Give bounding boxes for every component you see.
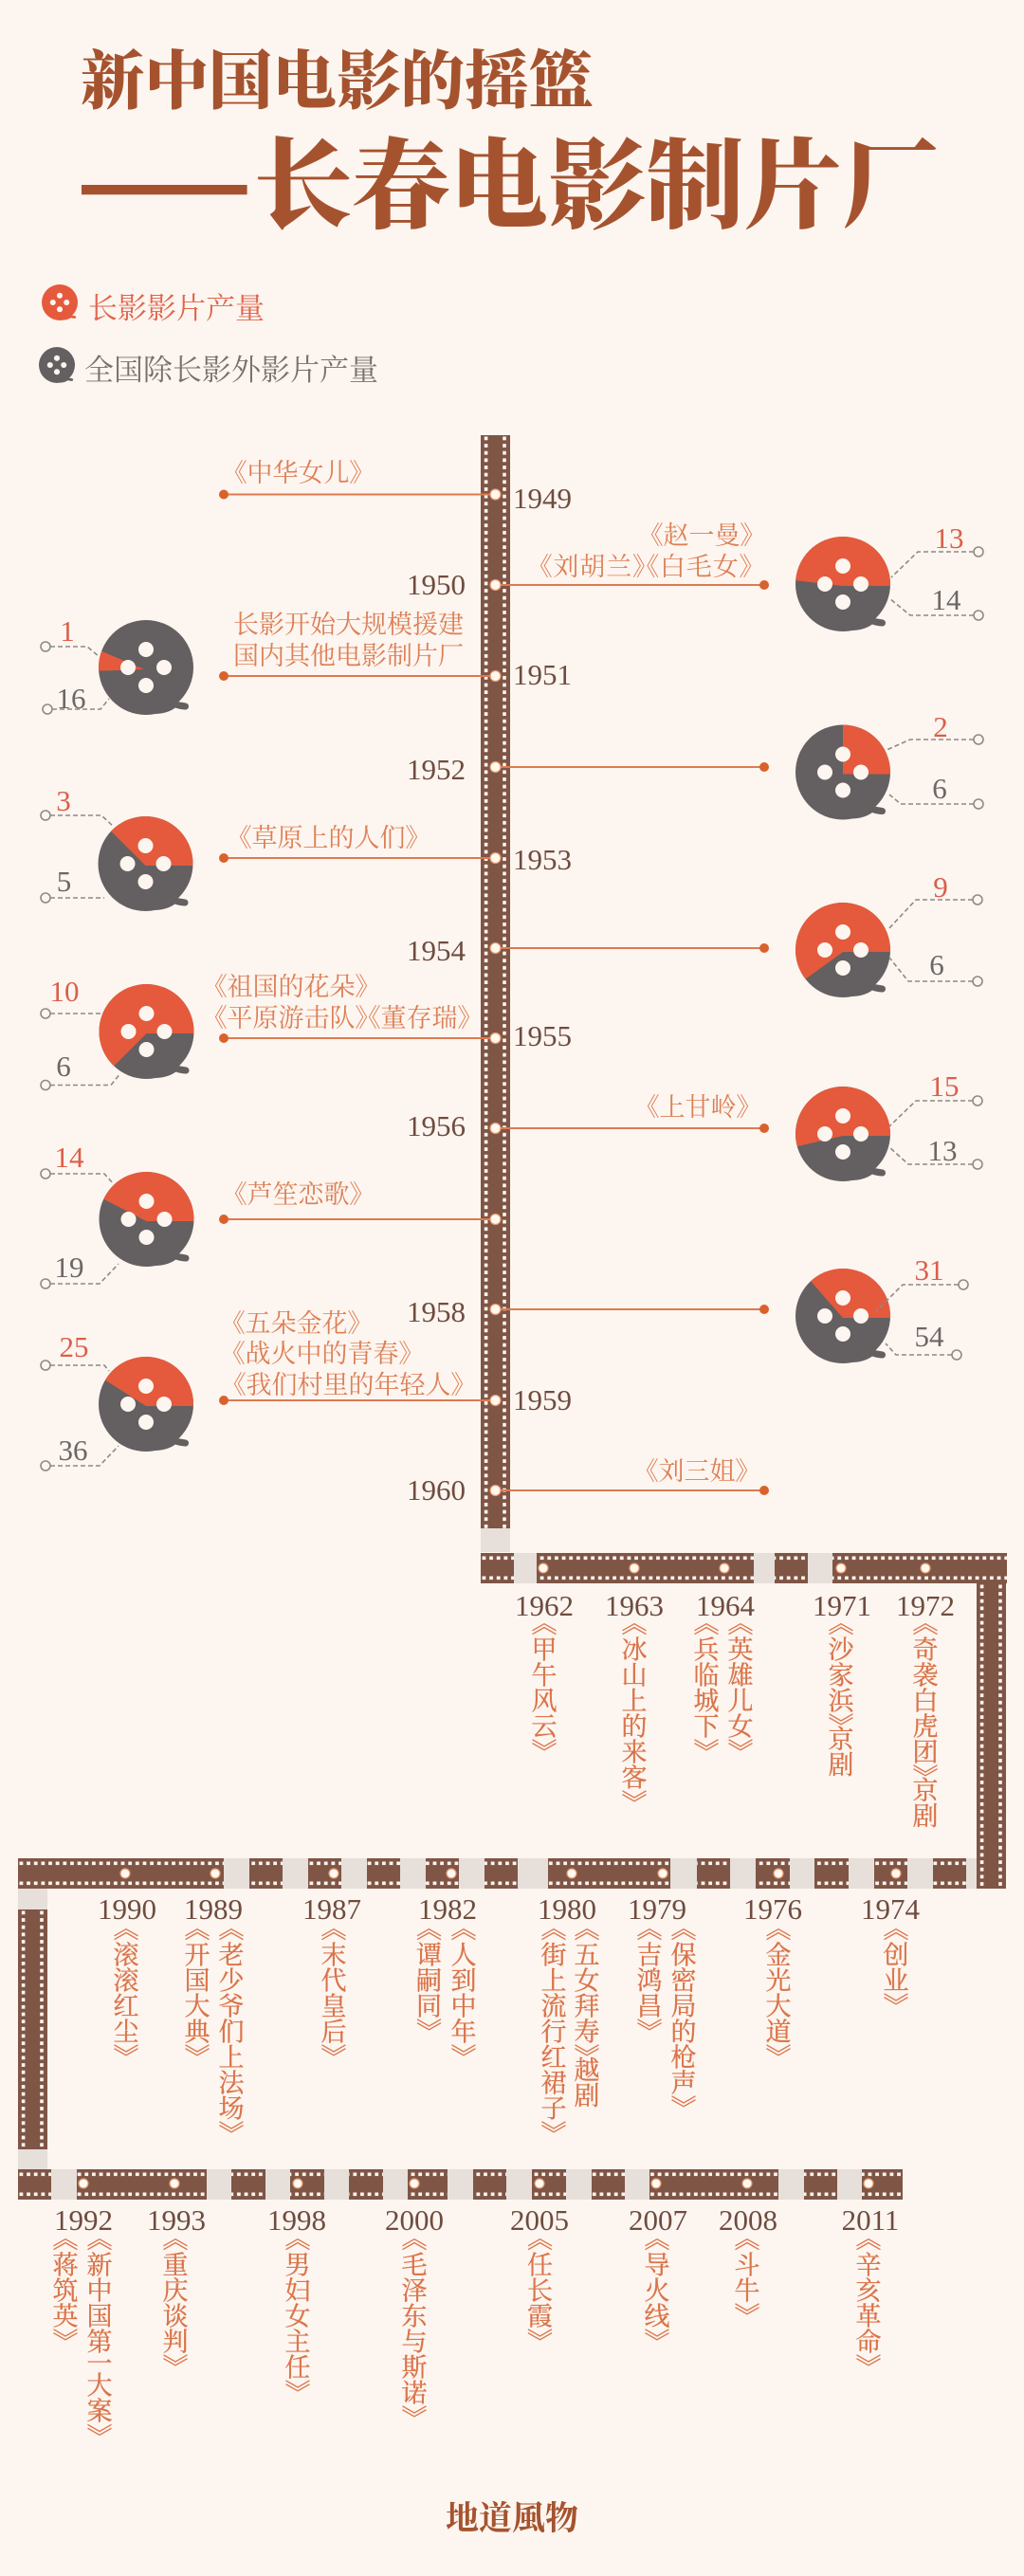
1990: 《滚滚红尘》 xyxy=(108,1928,144,2056)
1992 xyxy=(47,2203,118,2436)
title line 1: 新中国电影的摇篮 xyxy=(81,30,594,122)
1976: 1976 xyxy=(743,1892,802,1926)
2000: 《毛泽东与斯诺》 xyxy=(396,2238,432,2418)
1980: 《五女拜寿》越剧 xyxy=(569,1928,605,2108)
1990: 1990 xyxy=(98,1892,156,1926)
2005: 2005 xyxy=(510,2203,569,2237)
1989: 1989 xyxy=(184,1892,243,1926)
1998 xyxy=(267,2203,326,2392)
reel 1951: 1 / 16 xyxy=(41,614,193,715)
film strip: vertical 1949-1960 xyxy=(481,435,510,1552)
1980: 《街上流行红裙子》 xyxy=(535,1928,573,2133)
reel 1950: 13 / 14 xyxy=(795,529,984,631)
film strip: right vertical connector xyxy=(977,1583,1006,1889)
1972 xyxy=(896,1589,955,1828)
1993: 《重庆谈判》 xyxy=(157,2238,193,2366)
reel 1953: 3 / 5: 5 xyxy=(57,865,71,898)
1998: 1998 xyxy=(267,2203,326,2237)
film title labels 1949-1960: 《芦笙恋歌》 xyxy=(234,1174,362,1211)
1974 xyxy=(861,1892,920,2005)
1987 xyxy=(302,1892,361,2056)
film title labels 1949-1960: 《刘胡兰》《白毛女》 xyxy=(539,546,753,583)
1963 xyxy=(605,1589,664,1802)
film title labels 1949-1960: 《上甘岭》 xyxy=(647,1087,749,1124)
1979: 《吉鸿昌》 xyxy=(631,1928,667,2031)
2008: 2008 xyxy=(719,2203,777,2237)
1964 xyxy=(688,1589,759,1751)
1982: 《人到中年》 xyxy=(446,1928,482,2056)
years on vertical strip: 1951 xyxy=(513,658,572,691)
reel 1958: 31 / 54 xyxy=(795,1253,968,1363)
1974: 1974 xyxy=(861,1892,920,1926)
years on vertical strip: 1959 xyxy=(513,1383,572,1416)
film title labels 1949-1960 xyxy=(214,452,753,1488)
film title labels 1949-1960: 长影开始大规模援建 xyxy=(233,604,464,641)
1982: 1982 xyxy=(418,1892,477,1926)
reel 1955: 10 / 6 xyxy=(40,982,193,1090)
1989: 《开国大典》 xyxy=(178,1928,216,2056)
1963: 《冰山上的来客》 xyxy=(616,1623,652,1802)
film strip: horizontal 1962-1972 xyxy=(481,1553,1007,1583)
1964: 《英雄儿女》 xyxy=(722,1623,759,1751)
reel 1951: 1 / 16: 1 xyxy=(60,614,75,648)
1993: 1993 xyxy=(147,2203,206,2237)
years on vertical strip: 1955 xyxy=(513,1019,572,1052)
1971: 《沙家浜》京剧 xyxy=(823,1623,859,1777)
1964: 《兵临城下》 xyxy=(688,1623,724,1751)
2011: 《辛亥革命》 xyxy=(850,2238,887,2366)
1964: 1964 xyxy=(696,1589,755,1622)
reel 1953: 3 / 5: 3 xyxy=(56,784,71,817)
1974: 《创业》 xyxy=(878,1928,914,2005)
years on vertical strip xyxy=(407,482,572,1507)
2007 xyxy=(629,2203,687,2341)
reel 1955: 10 / 6: 6 xyxy=(56,1050,71,1083)
1998: 《男妇女主任》 xyxy=(279,2238,317,2392)
years on vertical strip: 1953 xyxy=(513,843,572,876)
2007: 2007 xyxy=(629,2203,687,2237)
film title labels 1949-1960: 《草原上的人们》 xyxy=(239,817,418,854)
legend xyxy=(39,284,378,389)
legend item: national output excluding Changying: 全国除长影外影片产量 xyxy=(84,346,378,389)
2008 xyxy=(719,2203,777,2315)
legend item: Changying output: 长影影片产量 xyxy=(88,284,265,327)
1979 xyxy=(628,1892,702,2108)
1962: 《甲午风云》 xyxy=(525,1623,563,1751)
reel 1954: 9 / 6 xyxy=(795,878,983,997)
reel 1957: 14 / 19 xyxy=(41,1141,203,1288)
reel 1952: 2 / 6 xyxy=(795,710,983,819)
reel 1955: 10 / 6: 10 xyxy=(49,975,80,1008)
title line 2: 长春电影制片厂 xyxy=(254,107,940,248)
1992: 《新中国第一大案》 xyxy=(82,2238,118,2436)
2007: 《导火线》 xyxy=(639,2238,675,2341)
entries 1962-1972 xyxy=(515,1589,955,1828)
reel 1958: 31 / 54: 31 xyxy=(914,1253,944,1287)
1989: 《老少爷们上法场》 xyxy=(212,1928,250,2133)
2011 xyxy=(842,2203,899,2366)
1987: 《末代皇后》 xyxy=(315,1928,353,2056)
film title labels 1949-1960: 《中华女儿》 xyxy=(234,452,362,489)
film strip: horizontal 1974-1990 xyxy=(18,1858,977,1889)
film title labels 1949-1960: 《平原游击队》《董存瑞》 xyxy=(214,997,470,1034)
reel 1957: 14 / 19: 14 xyxy=(55,1141,84,1174)
reel 1958: 31 / 54: 54 xyxy=(914,1320,944,1353)
1987: 1987 xyxy=(302,1892,361,1926)
entries 1992-2011 xyxy=(47,2203,899,2436)
film title labels 1949-1960: 《我们村里的年轻人》 xyxy=(233,1364,464,1401)
title xyxy=(79,30,940,248)
1980 xyxy=(535,1892,605,2133)
1962 xyxy=(515,1589,574,1751)
entries 1974-1990 xyxy=(98,1892,920,2133)
years on vertical strip: 1956 xyxy=(407,1109,466,1142)
2000 xyxy=(385,2203,444,2418)
years on vertical strip: 1950 xyxy=(407,568,466,601)
reel 1952: 2 / 6: 6 xyxy=(932,772,947,805)
1979: 1979 xyxy=(628,1892,686,1926)
1963: 1963 xyxy=(605,1589,664,1622)
reel 1954: 9 / 6: 6 xyxy=(929,948,944,981)
reel 1956: 15 / 13 xyxy=(795,1077,983,1181)
film title labels 1949-1960: 《赵一曼》 xyxy=(650,515,753,552)
2005 xyxy=(510,2203,569,2341)
1982: 《谭嗣同》 xyxy=(411,1928,448,2031)
leader lines and sprocket markers for 1949-1960 xyxy=(219,489,769,1496)
reel 1950: 13 / 14: 13 xyxy=(935,521,963,555)
1992: 《蒋筑英》 xyxy=(47,2238,83,2341)
reel 1959: 25 / 36: 25 xyxy=(59,1330,89,1363)
footer credit: 地道風物 xyxy=(446,2493,578,2540)
film title labels 1949-1960: 《战火中的青春》 xyxy=(232,1333,411,1370)
1976 xyxy=(743,1892,802,2056)
years on vertical strip: 1954 xyxy=(407,934,466,967)
reel 1950: 13 / 14: 14 xyxy=(931,583,961,616)
title line 2: —— xyxy=(79,108,250,245)
years on vertical strip: 1952 xyxy=(407,753,466,786)
years on vertical strip: 1960 xyxy=(407,1473,466,1507)
years on vertical strip: 1949 xyxy=(513,482,572,515)
2008: 《斗牛》 xyxy=(728,2238,766,2315)
reel 1957: 14 / 19: 19 xyxy=(55,1251,83,1284)
film title labels 1949-1960: 国内其他电影制片厂 xyxy=(233,635,464,672)
film title labels 1949-1960: 《五朵金花》 xyxy=(232,1303,360,1340)
1976: 《金光大道》 xyxy=(760,1928,796,2056)
reel 1959: 25 / 36 xyxy=(41,1330,203,1471)
1972: 《奇袭白虎团》京剧 xyxy=(906,1623,944,1828)
1962: 1962 xyxy=(515,1589,574,1622)
reel 1952: 2 / 6: 2 xyxy=(933,710,948,743)
1992: 1992 xyxy=(54,2203,113,2237)
reel 1959: 25 / 36: 36 xyxy=(59,1434,87,1467)
film strip: horizontal 1992-2011 xyxy=(18,2169,903,2200)
1972: 1972 xyxy=(896,1589,955,1622)
reel 1953: 3 / 5 xyxy=(40,792,193,911)
reel 1956: 15 / 13: 13 xyxy=(927,1134,958,1167)
reel 1951: 1 / 16: 16 xyxy=(57,682,85,715)
2011: 2011 xyxy=(842,2203,899,2237)
reel 1956: 15 / 13: 15 xyxy=(929,1069,960,1103)
2005: 《任长霞》 xyxy=(521,2238,558,2341)
1993 xyxy=(147,2203,206,2366)
1980: 1980 xyxy=(538,1892,596,1926)
1990 xyxy=(98,1892,156,2056)
1989 xyxy=(178,1892,250,2133)
1982 xyxy=(411,1892,482,2056)
film title labels 1949-1960: 《祖国的花朵》 xyxy=(214,966,368,1003)
reel 1954: 9 / 6: 9 xyxy=(933,870,948,904)
years on vertical strip: 1958 xyxy=(407,1295,466,1328)
film strip: left vertical connector xyxy=(18,1889,47,2169)
2000: 2000 xyxy=(385,2203,444,2237)
1971: 1971 xyxy=(813,1589,871,1622)
1979: 《保密局的枪声》 xyxy=(666,1928,702,2108)
1971 xyxy=(813,1589,871,1777)
film title labels 1949-1960: 《刘三姐》 xyxy=(646,1451,748,1488)
